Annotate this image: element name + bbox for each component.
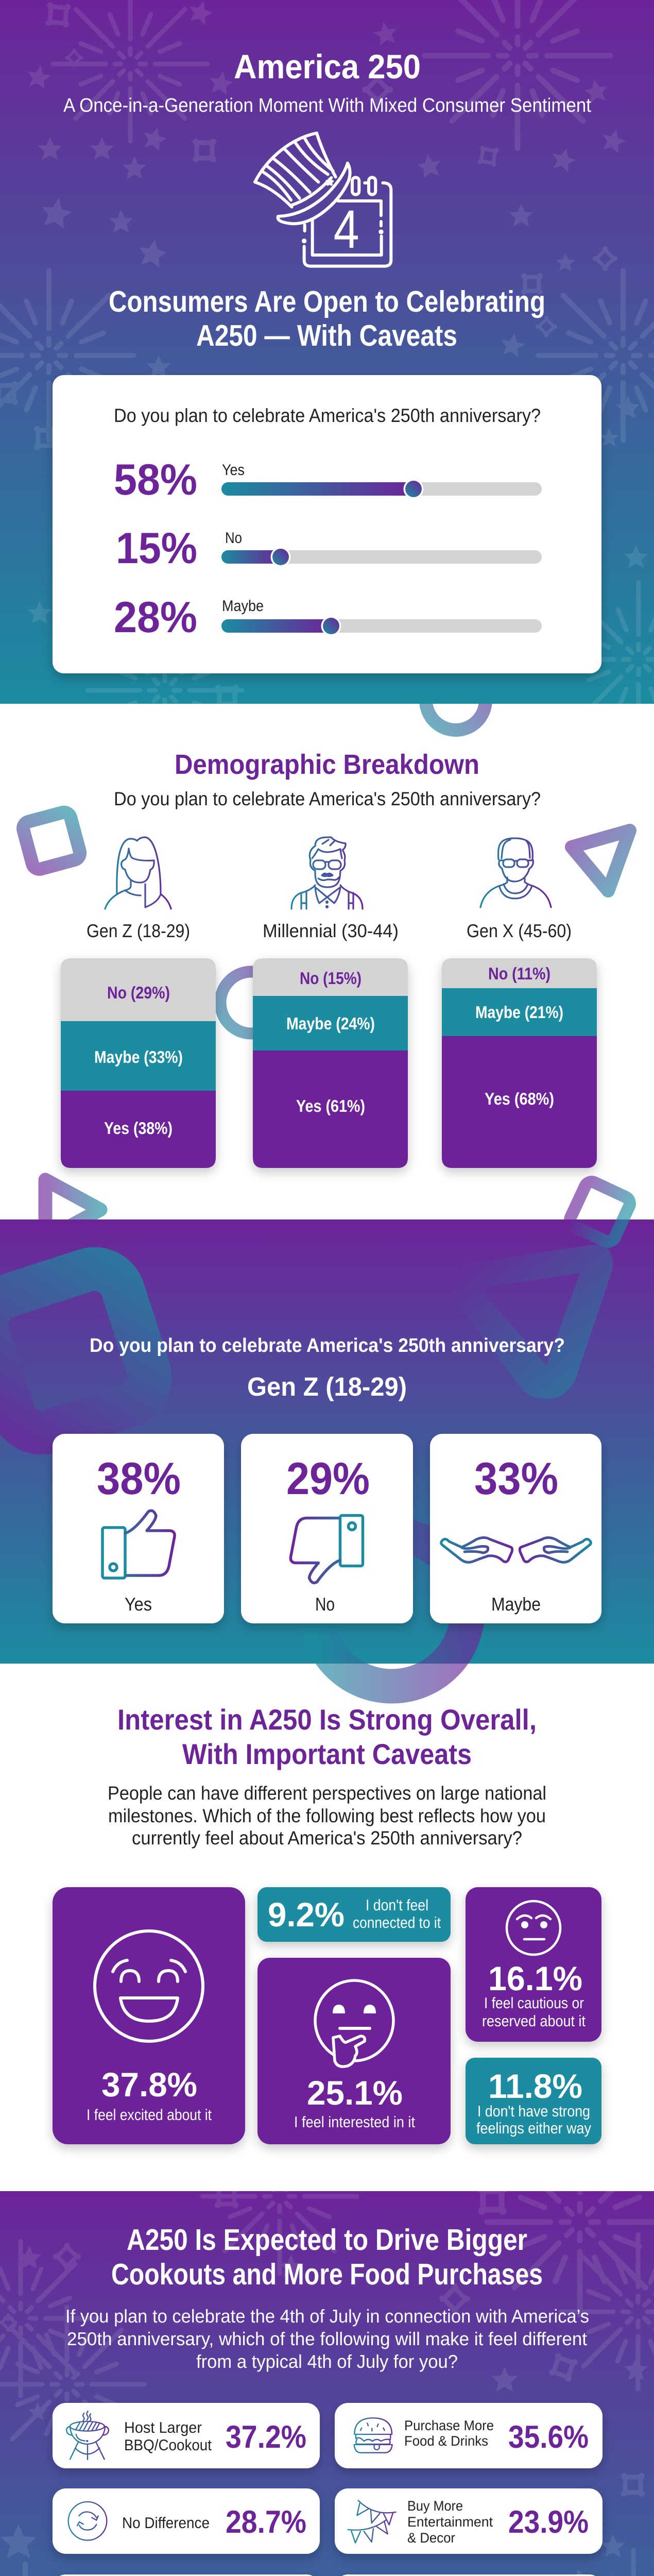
icon: thumbs down [290, 1516, 363, 1583]
stacked column: millennial [253, 958, 408, 1168]
subtitle: A Once-in-a-Generation Moment With Mixed Consumer Sentiment [63, 95, 591, 116]
card: no difference: No Difference [122, 2515, 210, 2532]
card: maybe [430, 1434, 601, 1623]
generation labels: Gen Z (18-29) [87, 920, 190, 941]
decorative large square [0, 1261, 158, 1440]
card: excited 37.8%: I feel excited about it [87, 2107, 212, 2124]
stacked column: millennial: Maybe (24%) [286, 1014, 375, 1033]
card: host larger bbq: BBQ/Cookout [124, 2437, 212, 2454]
question: currently feel about America's 250th anniversary? [132, 1827, 522, 1849]
card: cautious 16.1%: reserved about it [482, 2013, 586, 2030]
decorative small square [568, 1180, 632, 1244]
icon: neutral face [507, 1901, 560, 1955]
bar: maybe [114, 593, 542, 642]
background fireworks [0, 0, 654, 768]
card: yes: 38% [97, 1453, 181, 1504]
icon: uncle sam hat on calendar: 4 [334, 199, 359, 259]
heading: Interest in A250 Is Strong Overall, [117, 1703, 537, 1736]
card: no strong feelings 11.8% [466, 2058, 601, 2144]
card: buy more entertainment: Buy More [407, 2498, 463, 2514]
stacked column: gen x [442, 958, 597, 1168]
decorative large triangle [451, 1245, 613, 1399]
panel: hero [0, 0, 654, 768]
card: try new recipes [335, 2574, 603, 2576]
card: host larger bbq [53, 2403, 320, 2468]
question: If you plan to celebrate the 4th of July in connection with America’s [65, 2306, 589, 2327]
card: purchase more food: 35.6% [508, 2419, 589, 2455]
generation labels: Gen X (45-60) [467, 920, 572, 941]
card: interested 25.1% [257, 1958, 451, 2144]
decorative rounded square left [22, 811, 81, 871]
card: no strong feelings 11.8%: feelings either way [476, 2120, 591, 2137]
card: interested 25.1%: 25.1% [307, 2074, 403, 2112]
heading [111, 2223, 543, 2291]
heading: Demographic Breakdown [175, 749, 479, 780]
panel: survey card [53, 375, 601, 673]
question: milestones. Which of the following best reflects how you [108, 1805, 546, 1826]
heading: Cookouts and More Food Purchases [111, 2258, 543, 2291]
card: yes [53, 1434, 224, 1623]
card: buy more entertainment: & Decor [407, 2530, 455, 2546]
bar: yes: 58% [114, 455, 197, 504]
question: 250th anniversary, which of the following will make it feel different [67, 2328, 587, 2349]
card: not connected 9.2% [257, 1887, 451, 1942]
stacked column: millennial: No (15%) [300, 969, 362, 988]
icon: thumbs up [102, 1511, 175, 1578]
bar: maybe: Maybe [222, 598, 264, 615]
card: no difference [53, 2488, 320, 2554]
card: cautious 16.1%: I feel cautious or [484, 1995, 584, 2012]
card: not connected 9.2%: connected to it [353, 1914, 441, 1931]
survey question: Do you plan to celebrate America's 250th anniversary? [114, 405, 541, 426]
bar: maybe: 28% [114, 593, 197, 642]
heading: Consumers Are Open to Celebrating [109, 285, 545, 318]
icon: gen x man [480, 838, 551, 907]
stacked column: gen x: Maybe (21%) [475, 1003, 563, 1022]
card: interested 25.1%: I feel interested in it [294, 2114, 416, 2131]
stacked column: gen z: No (29%) [107, 983, 170, 1002]
question: People can have different perspectives on large national [108, 1783, 546, 1804]
card: purchase more food: Purchase More [404, 2418, 494, 2433]
card: excited 37.8%: 37.8% [101, 2065, 197, 2104]
card: maybe: Maybe [491, 1594, 541, 1615]
decorative large ring [316, 1535, 468, 1686]
card: no [241, 1434, 413, 1623]
card: buy more entertainment: 23.9% [508, 2504, 589, 2540]
card: not connected 9.2%: I don't feel [366, 1897, 428, 1914]
card: no strong feelings 11.8%: 11.8% [488, 2067, 582, 2105]
heading: A250 — With Caveats [196, 319, 457, 352]
card: no strong feelings 11.8%: I don't have strong [477, 2103, 590, 2120]
subheading: Gen Z (18-29) [247, 1372, 407, 1401]
icon: grill [66, 2411, 109, 2460]
stacked column: gen z [61, 958, 216, 1168]
icon: thinking face [315, 1980, 393, 2066]
card: excited 37.8% [53, 1887, 245, 2144]
card: host larger bbq: Host Larger [124, 2419, 202, 2436]
icon: uncle sam hat on calendar [255, 133, 391, 266]
panel: demographic breakdown [22, 749, 630, 1240]
heading [109, 285, 545, 352]
bar: no: 15% [116, 524, 197, 573]
panel: interest in a250 [53, 1703, 601, 2144]
card: cautious 16.1%: 16.1% [488, 1959, 582, 1997]
decorative ring below hero [426, 670, 486, 730]
heading: A250 Is Expected to Drive Bigger [127, 2223, 527, 2257]
card: maybe: 33% [474, 1453, 558, 1504]
generation labels [87, 920, 572, 941]
card: cautious 16.1% [466, 1887, 601, 2042]
bar: yes [114, 455, 542, 504]
decorative triangle bottom left [45, 1180, 100, 1240]
icon: open hands [441, 1537, 591, 1562]
card: yes: Yes [125, 1594, 152, 1615]
bar: yes: Yes [222, 462, 245, 479]
heading: With Important Caveats [182, 1738, 472, 1770]
background fireworks [0, 2191, 654, 2576]
question: from a typical 4th of July for you? [196, 2351, 458, 2372]
stacked column: gen x: Yes (68%) [485, 1089, 554, 1108]
decorative triangle right [572, 831, 630, 891]
icon: laughing face [95, 1931, 203, 2041]
stacked column: gen z: Yes (38%) [104, 1118, 173, 1138]
question: Do you plan to celebrate America's 250th anniversary? [90, 1335, 565, 1357]
question [108, 1783, 546, 1849]
card: purchase more food: Food & Drinks [404, 2433, 488, 2449]
panel: food purchases [0, 2191, 654, 2576]
card: host larger bbq: 37.2% [226, 2419, 306, 2455]
card: no difference: 28.7% [226, 2504, 306, 2540]
card: no: No [315, 1594, 335, 1615]
card: purchase festive brands [53, 2574, 320, 2576]
stacked column: millennial: Yes (61%) [296, 1096, 365, 1115]
card: not connected 9.2%: 9.2% [268, 1895, 345, 1934]
title: America 250 [234, 47, 421, 86]
card: buy more entertainment [335, 2488, 603, 2554]
stacked column: gen x: No (11%) [488, 964, 550, 983]
heading [117, 1703, 537, 1770]
icon: burger [354, 2418, 392, 2453]
card: buy more entertainment: Entertainment [407, 2514, 493, 2530]
card: purchase more food [335, 2403, 603, 2468]
card: no: 29% [286, 1453, 370, 1504]
stacked column: gen z: Maybe (33%) [94, 1047, 183, 1066]
icon: millennial man [291, 837, 363, 909]
bar: no [116, 524, 542, 573]
question [65, 2306, 589, 2372]
icon: refresh arrows [68, 2502, 107, 2540]
icon: bunting [348, 2500, 395, 2543]
icon: gen z woman [105, 837, 171, 909]
generation labels: Millennial (30-44) [263, 920, 399, 941]
bar: no: No [225, 530, 242, 547]
panel: gen z breakdown [0, 1180, 654, 1686]
question: Do you plan to celebrate America's 250th anniversary? [114, 788, 541, 809]
decorative ring between columns [220, 972, 282, 1033]
